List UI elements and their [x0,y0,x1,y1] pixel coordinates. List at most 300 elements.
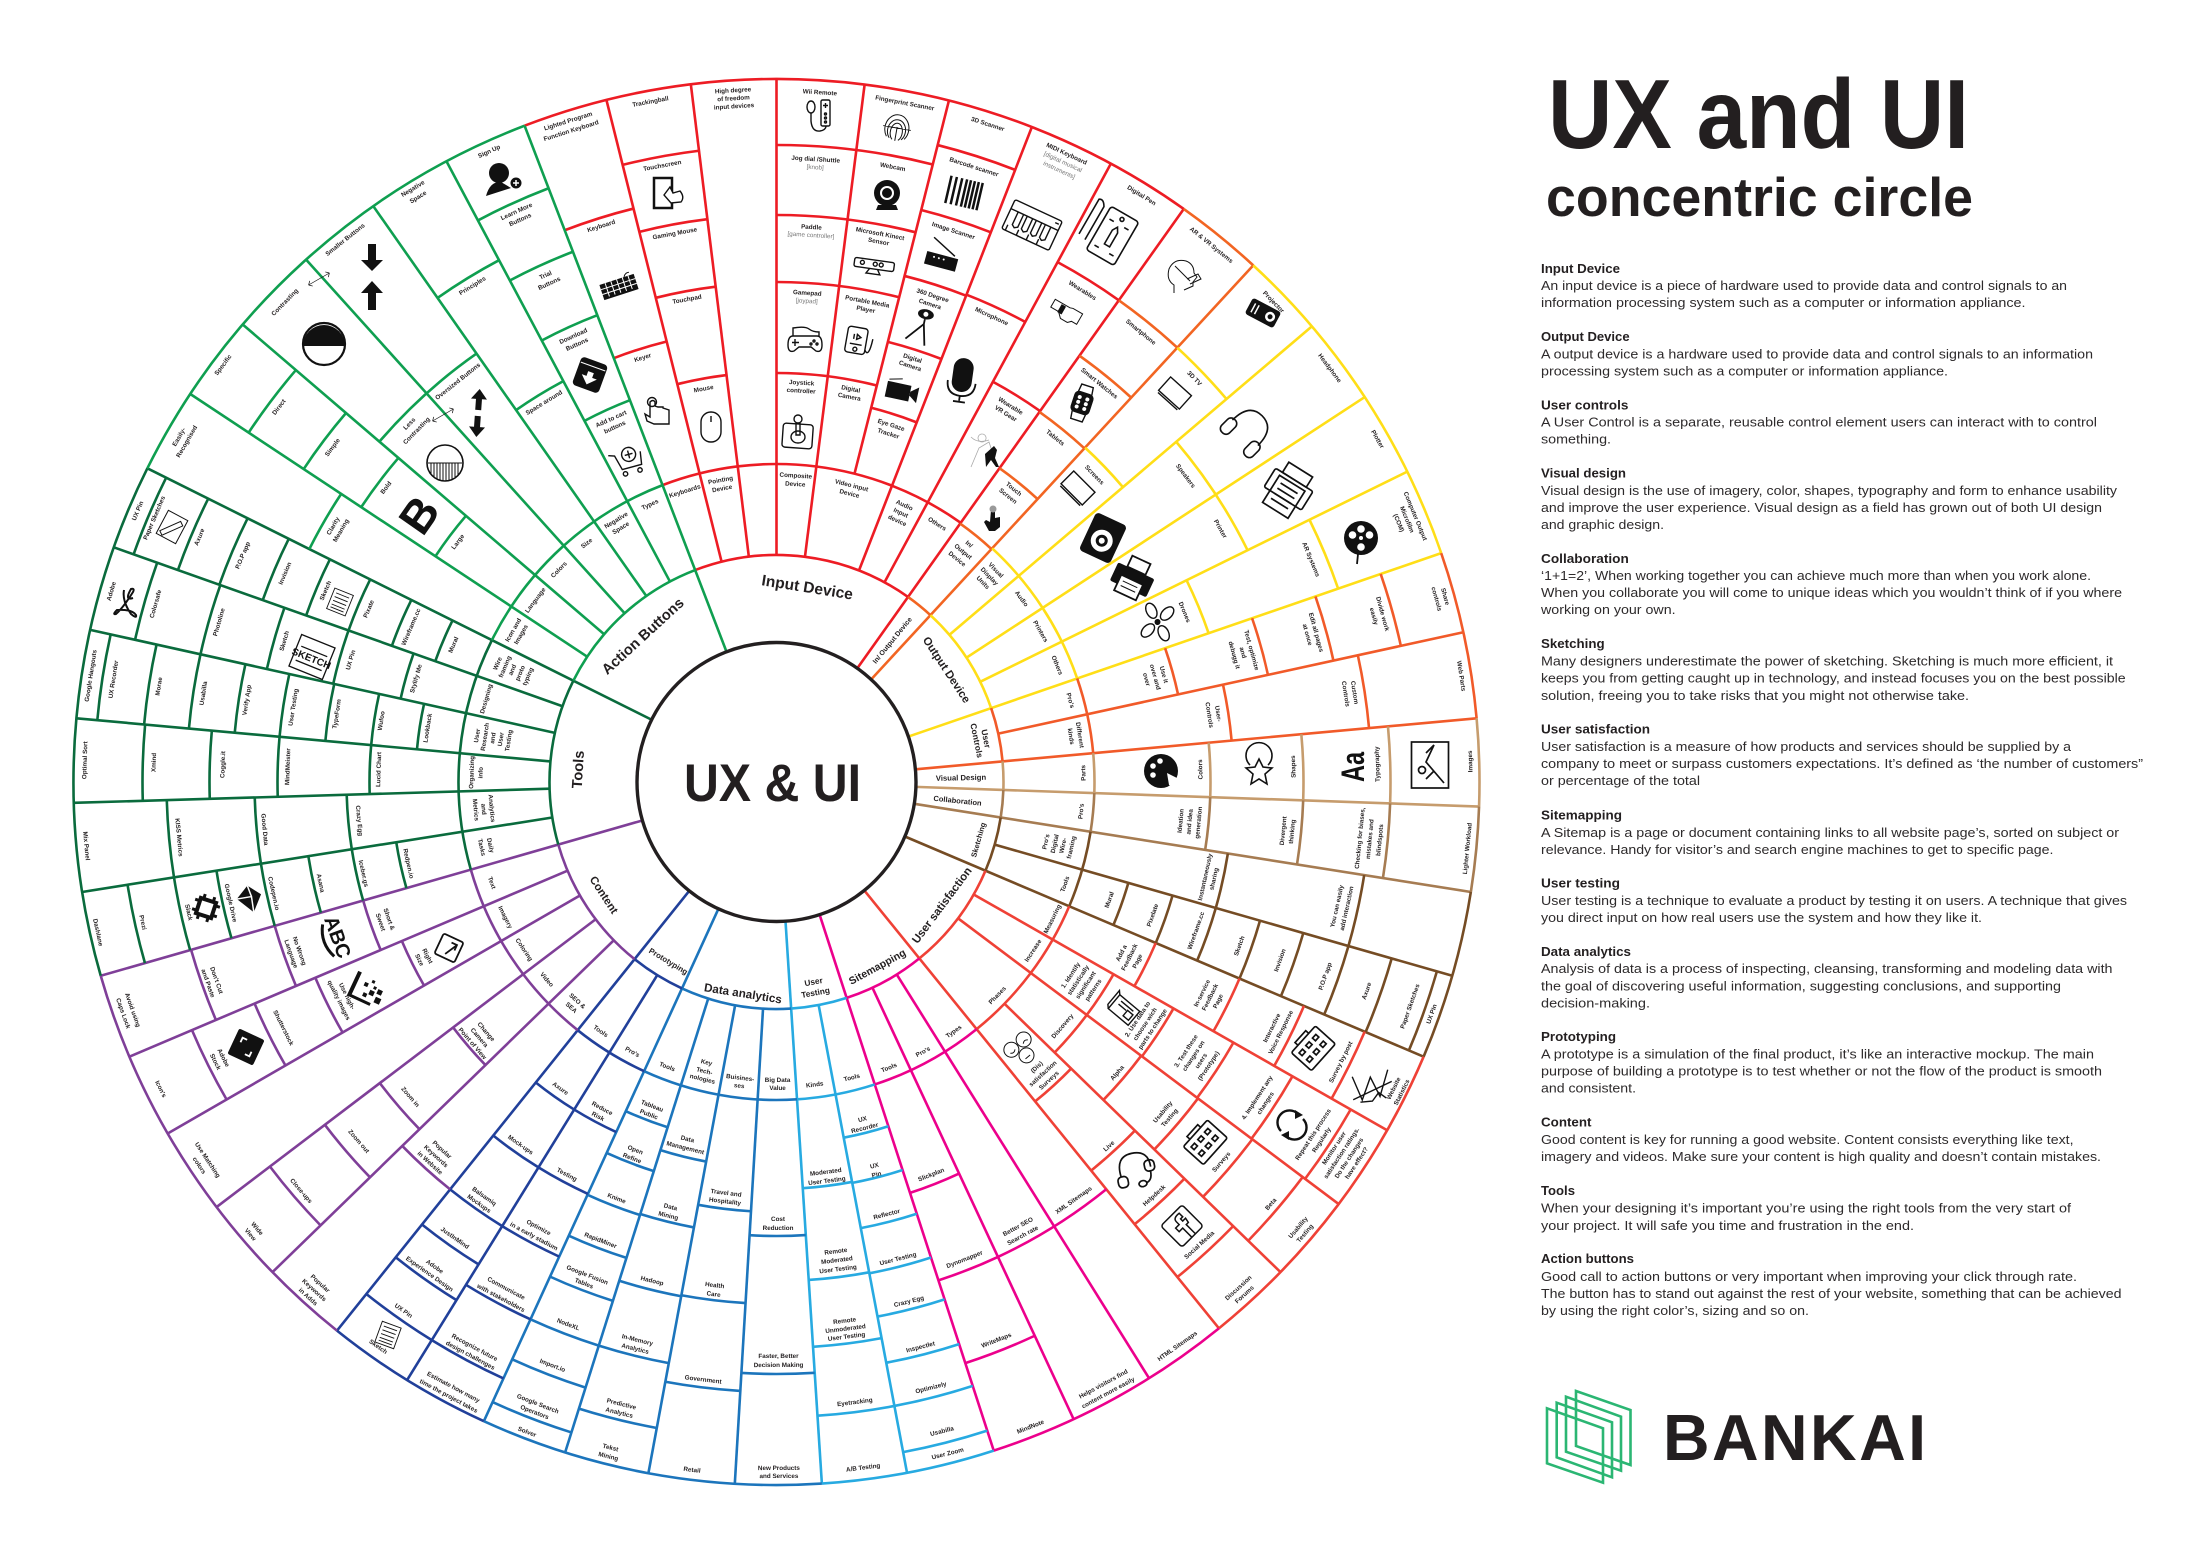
icon: speaker [1079,512,1127,564]
text: User satisfaction cell labels: Surveys [1038,1070,1061,1092]
text: Action Buttons cell labels: Download [558,327,589,346]
text: Data analytics cell labels: Google Fusion [565,1264,609,1287]
text: Sitemapping cell labels: Slickplan [917,1167,946,1183]
text: Visual Design cell labels: Shapes [1290,755,1298,778]
icon: statistics chart [1351,1069,1393,1103]
icon: headphones [1218,400,1278,460]
text: Content cell labels [114,865,620,1311]
text: Output Device cell labels: Plotter [1369,429,1385,450]
text: User Controls cell labels: User [979,728,993,750]
chart: Sketching wedge cells [905,818,1471,1057]
text: Collaboration cell labels: thinking [1288,819,1297,844]
text: In/Output cell labels: Touch [1004,481,1023,498]
text: Visual Design cell labels: Visual Design [936,773,986,783]
text: Output Device cell labels: Drones [1177,601,1192,624]
text: Data analytics cell labels: Key [700,1058,713,1068]
text: User satisfaction cell labels: Forums [1234,1284,1256,1305]
text: Content cell labels: Avoid using [123,992,142,1028]
text: Tools cell labels: Iceber.gs [357,860,370,888]
text: Data analytics cell labels: Faster, Better [758,1353,799,1360]
text block: Prototyping: A prototype is a simulation of the final product, it’s like an interactive mockup. The main [1541,1046,2094,1062]
text: Content cell labels: Point of View [457,1027,488,1061]
text: User satisfaction cell labels: (Dis) [1030,1060,1045,1075]
text block: Prototyping [1541,1029,2102,1096]
text: Output Device cell labels: (COM) [1391,513,1405,533]
icon: shapes star [1246,743,1272,784]
text: Data analytics cell labels: Cost [771,1216,786,1223]
text: Visual Design cell labels: Typography [1374,746,1382,782]
icon: bold letter B: B [388,486,450,544]
text: Data analytics cell labels: Data [680,1135,695,1145]
text block: Sketching: solution, freeing you to take risks that you might not otherwise take. [1541,688,1969,703]
text: Data analytics cell labels: Government [684,1374,723,1386]
icon: media player [844,326,874,356]
text: Sketching cell labels: Mural [1104,891,1116,909]
logo: BANKAI [1547,1391,1926,1483]
text: Input Device cell labels: Device [839,488,861,500]
text: Sitemapping cell labels [847,947,1199,1438]
text: Sketching cell labels: P.O.P app [1317,962,1334,991]
text: User satisfaction cell labels: changes [1256,1090,1276,1116]
text: Tools cell labels: Morae [154,676,164,696]
text: Input Device cell labels: Pointing [708,475,734,486]
text: Tools cell labels: Research [480,722,491,751]
text: Action Buttons cell labels [167,141,688,678]
text block: User satisfaction: company to meet or surpass customers expectations. It’s defined as ‘the number of customers” [1541,756,2143,771]
text block: User testing [1541,876,2128,925]
icon: nested parallelogram mark [1547,1391,1630,1483]
text: Action Buttons cell labels: Bold [379,480,393,496]
text: Data analytics cell labels: Hadoop [640,1275,664,1287]
text: User Testing cell labels: Unmoderated [825,1323,866,1335]
text: Input Device cell labels: Composite [779,472,813,481]
text block: Input Device [1541,261,2067,310]
text: Tools cell labels: Mix Panel [81,831,91,861]
text: Prototyping cell labels: Testing [555,1167,578,1183]
text block: Content: Content [1541,1115,1592,1130]
text block: Sketching [1541,636,2126,703]
text: Collaboration cell labels: Lighter Workload [1462,822,1474,875]
text: Action Buttons cell labels: Negative [400,179,427,199]
text: Prototyping cell labels: Axure [551,1081,570,1097]
text: Tools cell labels: Optimal Sort [81,740,89,779]
text: User Controls cell labels: kinds [1066,728,1075,746]
panel: Sitemapping sector [820,915,1219,1451]
text: Data analytics cell labels: Open [626,1144,644,1157]
text: Action Buttons cell labels: Negative [603,511,630,531]
text block: Action buttons: Action buttons [1541,1251,1634,1266]
text block: User testing: User testing [1541,876,1620,891]
text: Collaboration cell labels: Collaboration [933,794,982,808]
text: Sketching cell labels: Digital [1050,833,1061,854]
text: Action Buttons cell labels: Clarity [326,516,342,536]
text: User Testing cell labels: UX [869,1162,880,1171]
icon: 360 camera tripod [905,306,935,346]
text: Data analytics cell labels: In-Memory [621,1333,654,1348]
text: Input Device cell labels: Tracker [876,427,900,441]
text: Tools cell labels: Sketch [279,630,291,652]
text: Content cell labels: Use high- [337,982,356,1011]
text: Content cell labels: Use Matching [193,1141,222,1179]
icon: AR head [1168,260,1201,293]
text: Input Device cell labels: Jog dial /Shuttle [791,155,841,165]
text: Tools cell labels [81,488,588,953]
text: Data analytics cell labels: Travel and [710,1188,742,1199]
text: Tools cell labels: Axure [193,527,207,547]
text: Action Buttons cell labels: Space [611,520,631,536]
icon: kinect sensor [853,257,895,277]
text: User Controls cell labels: Edit all pages [1307,612,1325,653]
text: Output Device cell labels: Projector [1261,290,1286,315]
text: Sketching cell labels: Paper Sketches [1399,983,1422,1030]
text: Prototyping cell labels: design challenges [444,1340,496,1372]
text: Data analytics cell labels: Import.io [539,1358,566,1374]
panel: User Controls sector [915,553,1477,769]
text: User satisfaction cell labels: Do the changes [1334,1136,1366,1180]
text: Tools cell labels: Redpen.io [401,848,415,879]
text: Input Device cell labels: Wii Remote [803,88,838,97]
text: Output Device cell labels: 3D TV [1185,370,1203,388]
icon: film reel [1344,521,1378,564]
text: Input Device cell labels: Audio [895,499,914,513]
text: Input Device cell labels: Input [892,507,910,520]
text: User satisfaction cell labels: Social Media [1183,1230,1216,1261]
text block: Action buttons: The button has to stand out against the rest of your website, something that can be achieved [1541,1286,2122,1301]
text: Data analytics cell labels: Care [706,1290,721,1299]
text: User satisfaction cell labels: 4. Implement any [1241,1074,1275,1121]
text block: Sitemapping [1541,808,2120,857]
text: Tools cell labels: UX Pin [131,500,145,522]
text: Sketching cell labels: You can easily [1329,884,1346,928]
icon: pointing hand [645,398,669,424]
text: User satisfaction cell labels: Testing [1160,1107,1180,1129]
text: Input Device cell labels: Camera [898,360,922,373]
text: User Controls cell labels: Controls [968,722,985,759]
text: Data analytics cell labels: Reduction [763,1225,794,1232]
icon: sketch document small [375,1321,401,1349]
text: User satisfaction cell labels: Live [1102,1139,1117,1153]
text: Output Device cell labels: Audio [1013,590,1029,608]
text: Sitemapping cell labels: Pro's [915,1045,932,1059]
text: Input Device cell labels: Gaming Mouse [652,226,698,241]
text: Content cell labels: Camera [469,1027,489,1049]
text: User satisfaction cell labels: users [1194,1052,1209,1070]
text: Tools cell labels: Xmind [151,753,158,772]
text: Data analytics cell labels: Analytics [621,1342,650,1356]
text: Data analytics cell labels: Retail [683,1466,701,1475]
text: Content cell labels: Stock [208,1053,222,1072]
text block: Data analytics: decision-making. [1541,996,1650,1011]
title: concentric circle: concentric circle [1546,166,1973,228]
text: Content cell labels: Text [486,876,497,891]
text: User satisfaction cell labels: Alpha [1109,1064,1126,1082]
text: Action Buttons cell labels: Large [450,533,466,551]
icon: sketch document large: SKETCH [290,647,332,672]
text: Output Device cell labels: Others [1050,655,1064,677]
text: Content cell labels: Zoom out [346,1128,371,1155]
text block: definitions [1540,261,2143,1318]
icon: palette [1144,754,1179,789]
text: Visual Design cell labels [936,743,1475,791]
text block: User controls: User controls [1541,397,1628,412]
text: Input Device cell labels: 360 Degree [915,287,950,305]
text block: Data analytics: Data analytics [1541,944,1631,959]
text: Data analytics cell labels: Solver [517,1426,538,1439]
text: Data analytics cell labels: Management [666,1140,706,1157]
text: Data analytics cell labels: Analytics [605,1406,634,1420]
text: Tools cell labels: Dashlane [91,918,104,947]
text: Input Device cell labels: Barcode scanner [948,156,1000,179]
text block: Sketching: Sketching [1541,636,1605,651]
text: Content cell labels: Content [587,874,620,917]
text: Input Device cell labels: High degree [715,86,752,96]
text block: Content: Good content is key for running a good website. Content consists everything like text, [1541,1132,2074,1147]
chart: Content wedge cells [101,820,642,1331]
text: Sketching cell labels: Invision [1273,948,1288,973]
text: User Testing cell labels: Tools [843,1073,861,1083]
panel: User satisfaction sector [864,865,1424,1328]
text: User satisfaction cell labels: 2. Use data to [1124,1000,1152,1038]
text: User Testing cell labels: Remote [833,1316,857,1326]
text: Action Buttons cell labels: Specific [213,353,234,377]
text: Action Buttons cell labels: Colors [550,560,569,580]
text: Prototyping cell labels: with stakeholders [475,1282,526,1314]
icon: projector [1245,298,1281,328]
text: Content cell labels: View [243,1227,257,1243]
text: Tools cell labels: Tasks [476,838,487,857]
text: Prototyping cell labels: time the project takes [418,1378,479,1415]
text: Data analytics cell labels: RapidMiner [583,1231,618,1250]
text: Tools cell labels: Google Hangouts [84,649,99,702]
text block: User testing: you direct input on how real users use the system and how they like it. [1541,910,1982,925]
icon: sketch document medium [327,588,353,616]
text: Prototyping cell labels: Communicate [486,1276,526,1302]
chart: In/Output wedge cells [871,209,1253,679]
text: Data analytics cell labels: Hospitality [709,1196,742,1207]
text: Content cell labels: Coloring [514,937,534,963]
text: Input Device cell labels: [game controller] [787,231,835,241]
text: Tools cell labels: Wireframe.cc [401,607,423,647]
icon: oversized width arrows [431,406,455,424]
text: User satisfaction cell labels: Survey by post [1328,1040,1355,1084]
text: Tools cell labels: Lucid Chart [375,751,383,787]
text: Collaboration cell labels: mistakes and [1365,819,1376,859]
text block: Collaboration: ‘1+1=2’, When working together you can achieve much more than when you work alone. [1541,568,2091,583]
text: Input Device cell labels: controller [786,387,816,396]
text: Sketching cell labels: Wireframe.cc [1187,910,1207,950]
text: Collaboration cell labels: generation [1194,806,1204,839]
text block: Prototyping: and consistent. [1541,1081,1636,1096]
text block: Output Device [1541,329,2093,378]
text: Content cell labels: and Paste [199,968,216,999]
text: Data analytics cell labels: Google Search [516,1393,560,1416]
text: Sketching cell labels: UX Pin [1425,1003,1439,1025]
text: Data analytics cell labels: Data [663,1202,678,1213]
text: Tools cell labels: Usabilla [199,680,209,706]
icon: repeat arrows [1277,1110,1307,1140]
icon: gamepad [788,327,822,351]
text: Input Device cell labels: [knob] [806,164,824,172]
text block: User satisfaction [1541,722,2143,788]
panel: Input Device sector [525,79,1184,668]
text: Output Device cell labels [920,290,1428,706]
text: Action Buttons cell labels: Size [580,537,594,550]
logo wordmark: BANKAI [1663,1402,1926,1474]
text: User satisfaction cell labels: choose wich [1132,1007,1159,1042]
text: User satisfaction cell labels [910,865,1416,1310]
text: Output Device cell labels: Computer Output [1402,491,1428,542]
text: User satisfaction cell labels: Usability [1152,1100,1175,1124]
text: Input Device cell labels: Wearables [1067,280,1098,302]
icon: ABC language: ABC [319,913,355,961]
text: Prototyping cell labels: Optimize [525,1219,552,1237]
text: Prototyping cell labels: Tools [592,1024,609,1039]
text: Sketching cell labels: Tools [1059,875,1072,893]
text: User satisfaction cell labels: User satisfaction [910,865,975,946]
text: Action Buttons cell labels: Buttons [537,275,562,292]
text: Input Device cell labels: Input Device [760,572,854,604]
text: Action Buttons cell labels: Contrasting [402,416,432,446]
text: Input Device cell labels: Wearable [997,396,1024,417]
text: User satisfaction cell labels: 3. Test these [1173,1033,1200,1069]
chart: User Controls wedge cells [915,553,1477,769]
text: Tools cell labels: info [477,767,485,779]
text: Content cell labels: Right [420,947,434,966]
text: Input Device cell labels: Sensor [867,237,890,248]
text: Data analytics cell labels: New Products [758,1465,800,1472]
text: Action Buttons cell labels: Sign Up [477,144,502,160]
text block: Content [1541,1115,2101,1164]
text: Prototyping cell labels: Prototyping [647,946,690,977]
chart: User satisfaction wedge cells [864,871,1424,1328]
text: Data analytics cell labels: Predictive [606,1397,637,1412]
text: Data analytics cell labels: nologies [689,1073,716,1086]
text: Input Device cell labels: Microsoft Kinect [855,226,906,242]
text: Tools cell labels: Colorsafe [149,589,164,619]
text: User satisfaction cell labels: Add a [1115,944,1129,963]
icon: touchscreen tablet [654,178,683,208]
text: Sketching cell labels [969,817,1443,1037]
text: Prototyping cell labels: Risk [590,1111,606,1123]
text: Sketching cell labels: Axure [1361,981,1374,1001]
text: Content cell labels: Adobe [215,1048,231,1069]
icon: clipboard survey post [1288,1023,1335,1071]
text: Input Device cell labels: instruments] [1042,160,1076,181]
text: Sketching cell labels: framing [1066,835,1078,860]
text: Input Device cell labels: VR Gear [993,404,1018,424]
text: User Controls cell labels: Web Parts [1455,660,1467,692]
text: User Testing cell labels [794,974,967,1474]
icon: barcode [945,176,983,210]
text block: Sitemapping: A Sitemap is a page or document containing links to all website page’s, sorted on subject or [1541,825,2120,840]
text: User satisfaction cell labels: Statistics [1393,1078,1412,1107]
text: User satisfaction cell labels: statistically [1066,964,1091,997]
text: Collaboration cell labels [933,780,1474,880]
text: Input Device cell labels: Touchscreen [643,159,682,173]
text: Sketching cell labels: Pro's [1041,833,1052,850]
text: Tools cell labels: UX Pin [345,649,357,671]
text: User Testing cell labels: Pin [871,1170,882,1180]
icon: paper sketches pencil [156,510,188,544]
panel: Tools sector [74,468,652,976]
text: User Testing cell labels: A/B Testing [846,1462,881,1474]
text: Prototyping cell labels: Sketch [367,1338,388,1356]
text: Action Buttons cell labels: Space [409,189,428,205]
text: Prototyping cell labels: Experience Design [404,1255,454,1294]
text: Sitemapping cell labels: Types [945,1024,964,1040]
text: Content cell labels: Imagery [496,905,514,930]
text: Sketching cell labels: sharing [1208,867,1220,891]
icon: printer [1107,551,1160,604]
text: In/Output cell labels: Screen [997,487,1018,506]
text: Action Buttons cell labels: Buttons [508,212,533,228]
icon: adobe acrobat [114,589,136,617]
chart: Prototyping wedge cells [337,891,689,1421]
text: Tools cell labels: User [497,731,506,747]
icon: video camera [885,376,920,403]
text block: User controls [1541,397,2097,446]
text: User Controls cell labels: Test, optimize [1242,629,1260,672]
text: User satisfaction cell labels: satisfaction [1028,1060,1059,1088]
text: Tools cell labels: Asana [315,873,326,894]
text: User Testing cell labels: Moderated [821,1255,853,1266]
text: Content cell labels: Caps Lock [114,997,132,1030]
chart: Output Device wedge cells [908,265,1441,737]
text: Input Device cell labels: Device [712,484,733,494]
text: Output Device cell labels: Headphone [1316,353,1343,385]
text: Tools cell labels: and [489,732,498,744]
text: Input Device cell labels: Eye Gaze [877,418,906,433]
title: UX and UI: UX and UI [1548,59,1969,169]
text: Tools cell labels: Photoline [212,607,227,637]
text block: Data analytics [1541,944,2112,1011]
text: Action Buttons cell labels: Images [513,623,530,646]
text: Sketching cell labels: Pixelate [1146,903,1161,928]
text: Output Device cell labels: Printers [1031,620,1049,644]
text: Input Device cell labels: Keyboard [586,219,616,234]
chart: Data analytics wedge cells [484,909,822,1485]
text: User Controls cell labels: easily [1368,607,1379,626]
text: Sitemapping cell labels: Helps visitors find [1078,1368,1129,1401]
text block: Tools [1541,1183,2071,1233]
text block: Sitemapping: relevance. Handy for visitor’s and search engine machines to get to specific page. [1541,842,2053,857]
text: Prototyping cell labels: in a early stadium [509,1221,559,1253]
text block: User satisfaction: User satisfaction is a measure of how products and services should be supplied by a [1541,739,2072,754]
text: User Testing cell labels: Testing [800,985,831,1000]
text: Sitemapping cell labels: HTML Sitemaps [1156,1330,1199,1363]
text: User Testing cell labels: Eyetracking [837,1397,873,1408]
text: Sitemapping cell labels: Better SEO [1002,1216,1035,1238]
icon: dark half circle [303,323,345,365]
text: Content cell labels: SEO & [567,992,587,1011]
text: User Controls cell labels: Pro's [1064,692,1076,710]
text: Content cell labels: Change [476,1021,496,1043]
text: User satisfaction cell labels: Feedback [1201,982,1220,1012]
icon: joystick [782,415,813,449]
text block: Prototyping: Prototyping [1541,1029,1616,1044]
text: User satisfaction cell labels: Beta [1264,1197,1279,1212]
text: User satisfaction cell labels: Voice Response [1267,1009,1295,1056]
text: Sketching cell labels: Wire- [1058,837,1069,854]
text: User Testing cell labels: Reflector [873,1208,901,1221]
text: User satisfaction cell labels: Phases [988,985,1008,1006]
text block: Visual design: and graphic design. [1541,517,1664,532]
text: Sitemapping cell labels: MindNote [1016,1419,1046,1436]
text: User satisfaction cell labels: Discussion [1224,1274,1254,1302]
text block: Input Device: Input Device [1541,261,1620,276]
text: Collaboration cell labels: Pro's [1077,803,1086,819]
text: Sitemapping cell labels: Search rate [1006,1224,1040,1247]
